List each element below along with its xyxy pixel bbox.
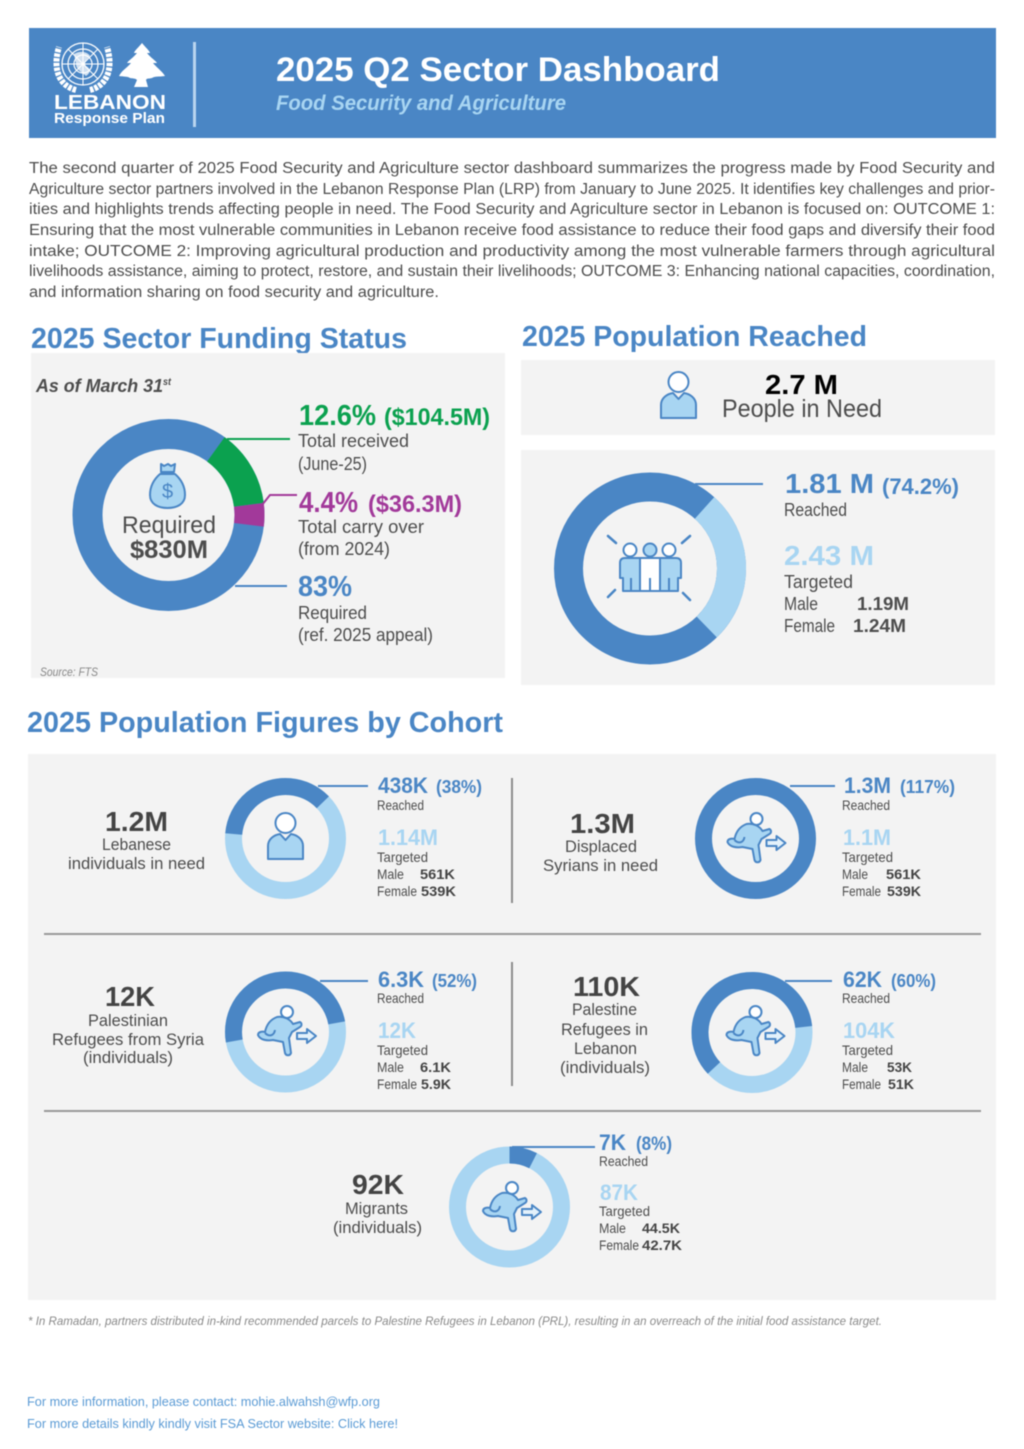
- icon: group of people: [608, 536, 690, 600]
- PRL figures: 62K: [843, 967, 882, 992]
- callout: reached: Reached: [784, 500, 847, 520]
- PRL need figure: Refugees in: [561, 1020, 648, 1039]
- PRL figures: [842, 967, 936, 1092]
- PRL figures: Male: [842, 1059, 868, 1075]
- Lebanese figures: Targeted: [377, 849, 428, 865]
- Migrants need figure: Migrants: [345, 1199, 408, 1218]
- Lebanese figures: 438K: [378, 773, 428, 798]
- heading: cohort figures: 2025 Population Figures by Cohort: [27, 707, 503, 739]
- icon: running person: [728, 813, 786, 862]
- Lebanese need figure: [68, 806, 205, 873]
- callout: reached: 1.81 M: [785, 468, 874, 499]
- icon: running person: [726, 1006, 784, 1055]
- Lebanese need figure: 1.2M: [105, 806, 168, 837]
- PRS figures: 5.9K: [421, 1076, 451, 1092]
- callout: targeted: 1.19M: [857, 594, 909, 614]
- PRS need figure: (individuals): [83, 1048, 173, 1067]
- PRL need figure: Lebanon: [574, 1039, 637, 1058]
- PRS donut: [225, 972, 346, 1092]
- panel: funding status: [31, 353, 505, 679]
- PRS figures: Female: [377, 1076, 417, 1092]
- intro text block: and information sharing on food security and agriculture.: [29, 284, 439, 301]
- Migrants figures: Reached: [599, 1153, 648, 1169]
- header banner: [29, 28, 996, 138]
- Lebanese figures: 1.14M: [378, 825, 438, 850]
- PRL need figure: 110K: [573, 971, 640, 1002]
- Syrians figures: 539K: [887, 883, 921, 899]
- Syrians figures: 1.3M: [844, 773, 891, 798]
- Migrants figures: [599, 1130, 682, 1253]
- icon: running person: [483, 1182, 541, 1231]
- PRS need figure: 12K: [105, 981, 155, 1012]
- callout: carry over: Total carry over: [298, 517, 424, 537]
- icon: money bag: [150, 464, 185, 508]
- PRL figures: 51K: [888, 1076, 914, 1092]
- callout: carry over: 4.4%: [299, 487, 358, 519]
- date label: As of March 31: [35, 376, 163, 396]
- PRS figures: 12K: [378, 1018, 416, 1043]
- callout: targeted: 1.24M: [853, 616, 906, 636]
- Syrians figures: 561K: [886, 866, 921, 882]
- Syrians need figure: Displaced: [565, 837, 637, 856]
- panel: population reached: [521, 450, 995, 685]
- callout: received: Total received: [298, 431, 409, 451]
- callout: received: ($104.5M): [384, 404, 490, 431]
- source note: Source: FTS: [40, 665, 98, 679]
- PRS need figure: Refugees from Syria: [52, 1030, 205, 1049]
- title: 2025 Q2 Sector Dashboard: [276, 51, 720, 89]
- intro text block: livelihoods assistance, aiming to protect, restore, and sustain their livelihoods; OUTCOME 3: Enhancing national capacities, coordination,: [29, 263, 995, 280]
- intro text block: Ensuring that the most vulnerable communities in Lebanon receive food assistance to reduce their food gaps and diversify their food: [29, 222, 995, 239]
- cohort: Lebanese: [68, 773, 482, 899]
- label: people in need: People in Need: [722, 395, 882, 423]
- Lebanese figures: [377, 773, 482, 899]
- PRS figures: [377, 967, 477, 1092]
- panel: cohorts: [28, 754, 996, 1300]
- PRL figures: 53K: [887, 1059, 912, 1075]
- PRL figures: Female: [842, 1076, 881, 1092]
- Syrians need figure: Syrians in need: [543, 856, 658, 875]
- intro text block: [29, 160, 995, 301]
- Lebanese figures: 561K: [420, 866, 455, 882]
- Migrants donut: [458, 1155, 562, 1259]
- icon: UN emblem: [56, 43, 110, 90]
- Lebanese figures: (38%): [436, 777, 482, 797]
- icon: cedar tree: [119, 43, 165, 87]
- PRS figures: Reached: [377, 990, 424, 1006]
- Syrians figures: Female: [842, 883, 881, 899]
- Lebanese need figure: Lebanese: [102, 835, 171, 854]
- Lebanese figures: 539K: [421, 883, 456, 899]
- PRL donut: [679, 959, 825, 1106]
- cohort: Palestinian Refugees from Syria: [52, 967, 477, 1092]
- callout: required: [298, 571, 433, 645]
- date label: st: [163, 377, 172, 388]
- Migrants figures: Female: [599, 1237, 639, 1253]
- cohort: Displaced Syrians: [543, 773, 955, 899]
- footnote: * In Ramadan, partners distributed in-kind recommended parcels to Palestine Refugees in Lebanon (PRL), resulting in an overreach of the initial food assistance target.: [28, 1314, 882, 1328]
- Migrants figures: 42.7K: [642, 1237, 682, 1253]
- funding donut chart: [55, 402, 282, 628]
- Syrians figures: 1.1M: [843, 825, 891, 850]
- Migrants figures: 87K: [600, 1180, 638, 1205]
- callout: targeted: Male: [784, 594, 818, 614]
- callout: received: 12.6%: [299, 400, 376, 432]
- PRS need figure: Palestinian: [88, 1011, 168, 1030]
- Migrants figures: (8%): [636, 1134, 672, 1155]
- Lebanese need figure: individuals in need: [68, 854, 205, 873]
- intro text block: intake; OUTCOME 2: Improving agricultural production and productivity among the most vulnerable farmers through agricultural: [29, 243, 995, 260]
- Lebanese figures: Female: [377, 883, 417, 899]
- PRL figures: Targeted: [842, 1042, 893, 1058]
- PRS figures: Targeted: [377, 1042, 428, 1058]
- reached donut chart: [535, 453, 765, 684]
- icon: money bag: $: [162, 481, 173, 503]
- callout: reached: [784, 468, 959, 520]
- callout: carry over: (from 2024): [298, 539, 390, 559]
- icon: person: [661, 372, 696, 418]
- Syrians need figure: 1.3M: [570, 808, 635, 839]
- Syrians figures: (117%): [900, 777, 955, 797]
- callout: carry over: [298, 487, 462, 559]
- cohort: Palestine Refugees in Lebanon: [560, 959, 936, 1106]
- Syrians figures: Reached: [842, 797, 890, 813]
- logo text: Response Plan: Response Plan: [54, 110, 165, 127]
- callout: required: (ref. 2025 appeal): [298, 625, 433, 645]
- PRL need figure: Palestine: [572, 1000, 637, 1019]
- Migrants need figure: (individuals): [333, 1218, 422, 1237]
- subtitle: Food Security and Agriculture: [276, 92, 566, 115]
- PRL need figure: (individuals): [560, 1058, 650, 1077]
- callout: reached: (74.2%): [882, 474, 959, 499]
- Migrants figures: Male: [599, 1220, 626, 1236]
- icon: running person: [258, 1006, 316, 1055]
- heading: population reached: 2025 Population Reached: [522, 321, 867, 353]
- callout: targeted: Female: [784, 616, 835, 636]
- website line: For more details kindly kindly visit FSA Sector website: Click here!: [27, 1416, 398, 1431]
- PRS figures: Male: [377, 1059, 404, 1075]
- callout: received: (June-25): [298, 454, 367, 474]
- callout: targeted: [784, 540, 909, 636]
- intro text block: ities and highlights trends affecting people in need. The Food Security and Agriculture sector in Lebanon is focused on: OUTCOME 1:: [29, 201, 995, 218]
- callout: received: [298, 400, 490, 474]
- Migrants need figure: 92K: [352, 1169, 404, 1200]
- PRL figures: (60%): [891, 971, 936, 991]
- Syrians figures: Targeted: [842, 849, 893, 865]
- donut centre label: Required: [122, 512, 216, 539]
- callout: targeted: Targeted: [784, 572, 853, 592]
- panel: people in need: [521, 360, 995, 435]
- Syrians donut: [704, 786, 808, 890]
- Lebanese figures: Male: [377, 866, 404, 882]
- Migrants figures: Targeted: [599, 1203, 650, 1219]
- Syrians figures: Male: [842, 866, 868, 882]
- Migrants figures: 44.5K: [642, 1220, 680, 1236]
- heading: funding status: 2025 Sector Funding Status: [31, 323, 407, 355]
- Migrants need figure: [333, 1169, 422, 1237]
- callout: targeted: 2.43 M: [784, 540, 874, 571]
- PRS need figure: [52, 981, 205, 1067]
- PRS figures: 6.1K: [420, 1059, 451, 1075]
- value: people in need: 2.7 M: [765, 369, 838, 400]
- PRL figures: Reached: [842, 990, 890, 1006]
- cohort: Migrants: [333, 1130, 682, 1259]
- callout: carry over: ($36.3M): [368, 491, 462, 518]
- PRS figures: (52%): [432, 971, 477, 991]
- Syrians figures: [842, 773, 955, 899]
- PRL figures: 104K: [843, 1018, 895, 1043]
- Syrians need figure: [543, 808, 658, 875]
- Lebanese figures: Reached: [377, 797, 424, 813]
- contact line: For more information, please contact: mohie.alwahsh@wfp.org: [27, 1394, 380, 1409]
- intro text block: Agriculture sector partners involved in the Lebanon Response Plan (LRP) from January to June 2025. It identifies key challenges and prior-: [29, 181, 995, 198]
- icon: person: [268, 813, 303, 859]
- Migrants figures: 7K: [599, 1130, 626, 1155]
- intro text block: The second quarter of 2025 Food Security and Agriculture sector dashboard summarizes the progress made by Food Security and: [29, 160, 995, 177]
- donut centre value: $830M: [130, 536, 208, 564]
- logo text: Lebanon: LEBANON: [54, 92, 166, 114]
- PRS figures: 6.3K: [378, 967, 424, 992]
- PRL need figure: [560, 971, 650, 1077]
- callout: required: 83%: [298, 571, 352, 603]
- Lebanese donut: [229, 782, 342, 895]
- callout: required: Required: [298, 603, 367, 623]
